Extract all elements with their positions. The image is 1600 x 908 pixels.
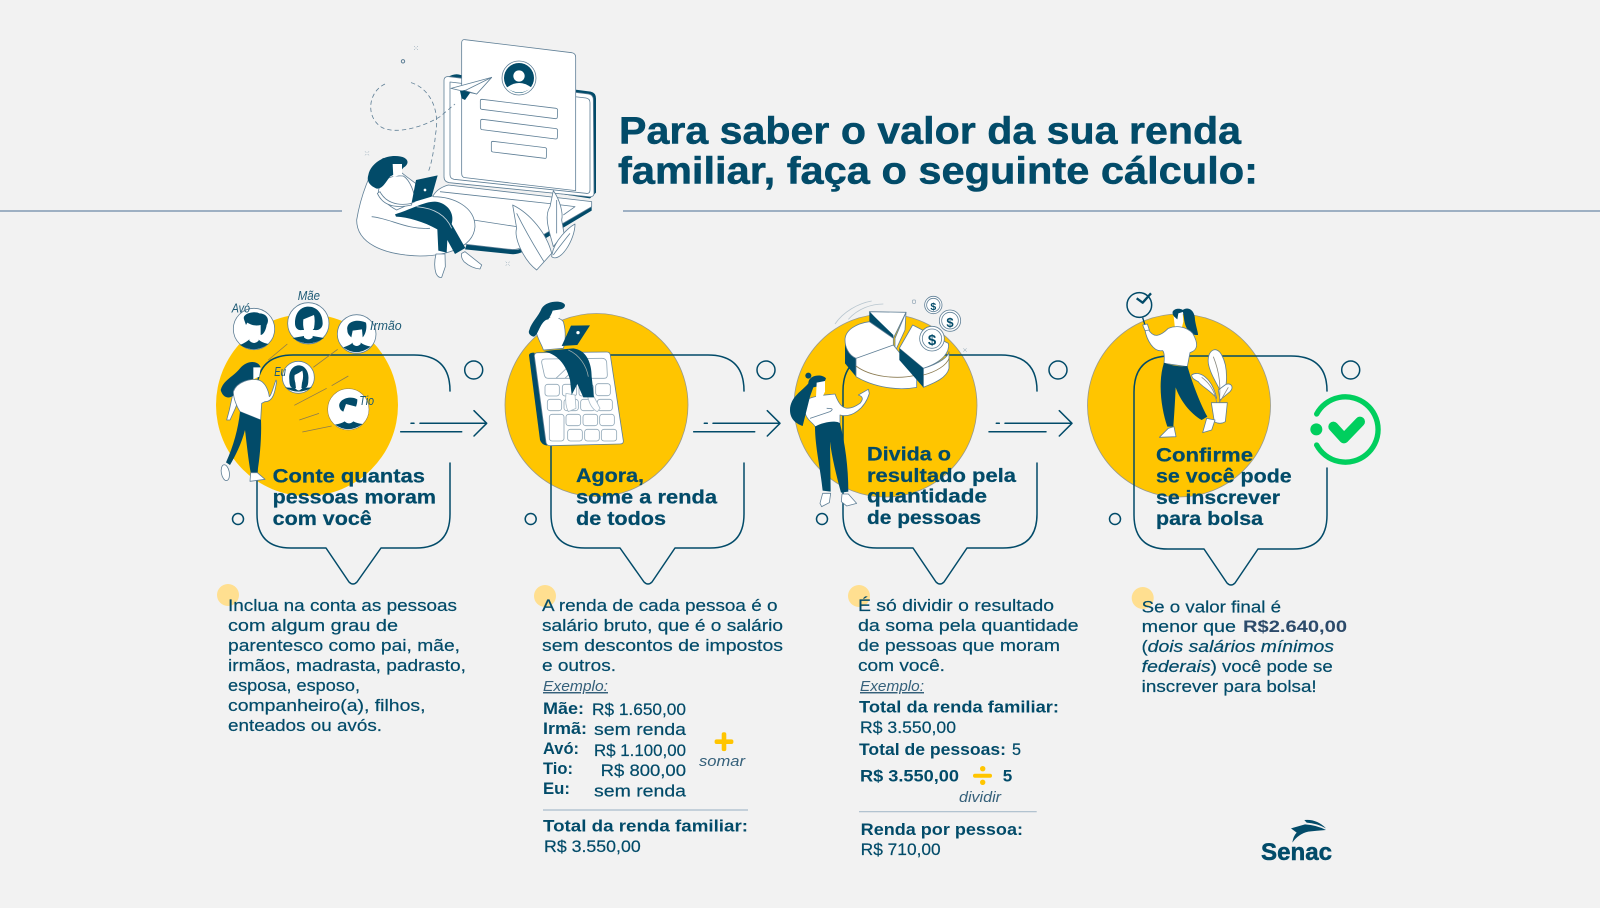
body text: enteados ou avós.	[228, 716, 382, 735]
heading	[576, 466, 717, 530]
body text: sem descontos de impostos	[542, 636, 783, 655]
heading: Confirme	[1156, 446, 1253, 467]
total	[543, 817, 748, 856]
beanbag	[357, 158, 475, 256]
heading: Conte quantas	[273, 466, 425, 488]
example: income list: R$ 1.100,00	[594, 741, 686, 760]
avatar labels: Avó	[231, 301, 250, 315]
heading: pessoas moram	[273, 488, 436, 509]
body text: federais	[1142, 657, 1211, 676]
example: calculation	[859, 679, 1059, 786]
body text: É só dividir o resultado	[858, 596, 1054, 615]
body text: da soma pela quantidade	[858, 616, 1079, 635]
heading: se inscrever	[1156, 488, 1281, 509]
avatar labels: Irmão	[370, 319, 402, 333]
title: familiar, faça o seguinte cálculo:	[618, 150, 1258, 192]
title	[618, 110, 1258, 192]
body text: com algum grau de	[228, 616, 398, 635]
coin symbols	[928, 301, 954, 349]
body text: Se o valor final é	[1142, 597, 1281, 616]
icon: woman with plant	[1127, 293, 1232, 437]
step 1 panel: count people	[216, 289, 487, 735]
woman	[378, 176, 415, 210]
body text: parentesco como pai, mãe,	[228, 636, 460, 655]
body text: A renda de cada pessoa é o	[542, 596, 778, 615]
body text: menor que	[1142, 617, 1236, 636]
coin symbols: $	[928, 332, 937, 349]
step 2 panel: sum incomes	[505, 302, 783, 856]
heading	[273, 466, 436, 530]
icon: divide sign	[959, 766, 1002, 806]
example: income list: Irmã:	[543, 719, 587, 738]
coin symbols: $	[930, 301, 936, 313]
avatar labels: Eu	[274, 365, 286, 379]
icon: coins	[920, 296, 961, 351]
icon: pie chart, coins and woman	[790, 296, 967, 507]
example: income list	[543, 679, 687, 801]
body text: e outros.	[542, 656, 616, 675]
title: Para saber o valor da sua renda	[619, 110, 1242, 152]
body text: esposa, esposo,	[228, 676, 360, 695]
body text: ) você pode se	[1211, 657, 1333, 676]
icon: divide sign: dividir	[959, 790, 1002, 806]
result	[861, 820, 1023, 859]
example: calculation: 5	[1012, 740, 1021, 759]
heading: se você pode	[1156, 467, 1292, 488]
avatar labels	[231, 289, 402, 408]
example: income list: Exemplo:	[543, 679, 608, 695]
icon: woman on calculator	[529, 302, 623, 446]
example: income list: R$ 800,00	[601, 761, 686, 780]
body text	[228, 596, 466, 735]
result: R$ 710,00	[861, 840, 941, 859]
example: calculation: R$ 3.550,00	[860, 767, 959, 786]
body text: inscrever para bolsa!	[1142, 677, 1317, 696]
heading: de pessoas	[867, 508, 981, 529]
icon: profile avatar	[502, 61, 536, 95]
hero illustration: woman on beanbag with laptop and form	[357, 40, 596, 277]
heading: quantidade	[867, 487, 987, 508]
heading	[1156, 446, 1292, 530]
example: income list: Tio:	[543, 759, 573, 778]
body text: com você.	[858, 656, 945, 675]
arrow	[401, 411, 487, 436]
avatar labels: Mãe	[298, 289, 320, 303]
icon: green check badge	[1310, 397, 1378, 462]
body text: dois salários mínimos	[1148, 637, 1335, 656]
body text	[542, 596, 783, 675]
example: calculation: R$ 3.550,00	[860, 718, 956, 737]
icon: plus sign: somar	[699, 754, 746, 770]
icon: paper plane	[451, 77, 492, 100]
body text: de pessoas que moram	[858, 636, 1060, 655]
step 4 panel: confirm	[1088, 293, 1378, 696]
body text: (	[1142, 637, 1148, 656]
example: calculation: 5	[1003, 767, 1012, 786]
logo: Senac: Senac	[1261, 839, 1332, 866]
example: income list: sem renda	[594, 720, 687, 739]
example: income list: Avó:	[543, 739, 579, 758]
body text: R$2.640,00	[1243, 617, 1347, 636]
example: income list: R$ 1.650,00	[592, 700, 686, 719]
arrow	[694, 411, 780, 436]
example: income list: Mãe:	[543, 699, 584, 718]
heading: some a renda	[576, 488, 717, 508]
heading: para bolsa	[1156, 509, 1263, 530]
coin symbols: $	[946, 315, 954, 330]
result: Renda por pessoa:	[861, 820, 1023, 839]
icon: plus sign	[699, 732, 746, 770]
example: calculation: Total da renda familiar:	[859, 698, 1059, 717]
total: Total da renda familiar:	[543, 817, 748, 836]
body text: irmãos, madrasta, padrasto,	[228, 656, 466, 675]
arrow	[989, 411, 1072, 436]
total: R$ 3.550,00	[544, 837, 641, 856]
heading: resultado pela	[867, 466, 1016, 487]
logo: Senac	[1261, 820, 1332, 866]
body text: companheiro(a), filhos,	[228, 696, 426, 715]
step 3 panel: divide	[790, 296, 1079, 859]
example: calculation: Exemplo:	[860, 679, 924, 695]
icon: family avatars and woman	[220, 303, 376, 481]
example: income list: Eu:	[543, 779, 570, 798]
heading: Divida o	[867, 445, 951, 466]
example: income list: sem renda	[594, 782, 687, 801]
plant	[547, 191, 564, 247]
body text	[858, 596, 1079, 675]
avatar labels: Tio	[359, 394, 374, 408]
heading: de todos	[576, 509, 666, 530]
body text	[1142, 597, 1347, 696]
body text: salário bruto, que é o salário	[542, 616, 783, 635]
body text: Inclua na conta as pessoas	[228, 596, 457, 615]
heading: com você	[273, 509, 372, 530]
heading: Agora,	[576, 466, 644, 487]
heading	[867, 445, 1016, 529]
example: calculation: Total de pessoas:	[859, 740, 1006, 759]
